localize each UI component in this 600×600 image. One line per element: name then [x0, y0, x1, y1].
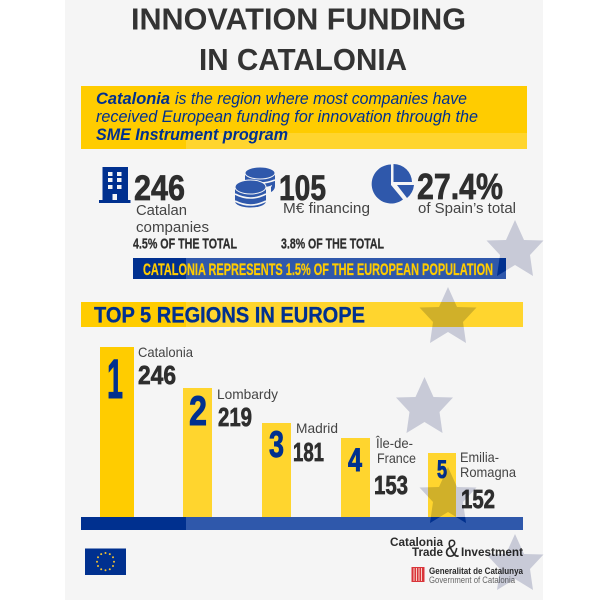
icon: EU flag — [85, 548, 126, 575]
section heading: top 5 regions — [81, 302, 523, 328]
bar 3: Madrid: 3 — [269, 424, 284, 465]
logo: Catalonia Trade & Investment: & — [445, 535, 459, 563]
stat: financing: 105 — [279, 169, 326, 208]
stat: companies: companies — [136, 219, 209, 236]
stat: share of Spain: of Spain’s total — [418, 200, 516, 217]
bar 4: Île-de-France — [341, 435, 416, 517]
bar 2: Lombardy: 2 — [189, 387, 207, 434]
stat: companies: 4.5% OF THE TOTAL — [133, 236, 237, 252]
stat: share of Spain — [372, 164, 516, 217]
logo: Generalitat de Catalunya: Government of Catalonia — [429, 575, 515, 585]
bar 5: Emilia-Romagna — [428, 449, 516, 517]
stat: companies: 246 — [134, 169, 185, 208]
intro banner: received European funding for innovation through the — [96, 107, 478, 126]
intro banner: Catalonia — [96, 89, 170, 108]
stat: companies — [99, 167, 237, 252]
bar 1: Catalonia: 1 — [107, 347, 123, 410]
title: IN CATALONIA — [199, 43, 407, 77]
stat: companies: Catalan — [136, 202, 187, 219]
bar 5: Emilia-Romagna: Romagna — [460, 464, 516, 480]
bar 4: Île-de-France: 4 — [348, 442, 362, 478]
intro banner — [81, 86, 527, 149]
logo: Catalonia Trade & Investment: Catalonia — [390, 537, 444, 549]
bar 1: Catalonia: 246 — [138, 360, 176, 390]
page panel background — [65, 0, 543, 600]
icon: pie chart — [372, 164, 414, 203]
stat: financing: M€ financing — [283, 200, 370, 217]
bar 3: Madrid — [262, 420, 338, 517]
title: INNOVATION FUNDING — [131, 2, 466, 36]
population banner — [133, 258, 506, 279]
logo: Catalonia Trade & Investment — [390, 535, 523, 563]
bar 3: Madrid: 181 — [293, 437, 324, 467]
logo: Generalitat de Catalunya: Generalitat de Catalunya — [429, 566, 524, 576]
logo: Catalonia Trade & Investment: Investment — [461, 547, 523, 559]
bar 1: Catalonia — [100, 344, 193, 517]
bar 5: Emilia-Romagna: 152 — [461, 484, 495, 514]
bar 2: Lombardy: Lombardy — [217, 386, 278, 402]
icon: building — [99, 167, 130, 203]
stat: financing: 3.8% OF THE TOTAL — [281, 236, 384, 252]
logo: Catalonia Trade & Investment: Trade — [412, 547, 443, 559]
stat: share of Spain: 27.4% — [417, 166, 503, 207]
icon: red emblem — [412, 567, 424, 582]
bar 5: Emilia-Romagna: Emilia- — [460, 449, 499, 465]
bar 1: Catalonia: Catalonia — [138, 344, 193, 360]
bar 4: Île-de-France: Île-de- — [375, 435, 413, 451]
bar chart: top 5 regions — [81, 344, 523, 530]
decorative EU stars — [396, 220, 544, 590]
bar 3: Madrid: Madrid — [296, 420, 338, 436]
bar 4: Île-de-France: 153 — [374, 470, 408, 500]
bar 2: Lombardy — [183, 386, 278, 517]
bar 4: Île-de-France: France — [377, 450, 416, 466]
logo: Generalitat de Catalunya — [412, 566, 524, 585]
icon: coins — [235, 167, 275, 208]
bar 2: Lombardy: 219 — [218, 402, 252, 432]
section heading: top 5 regions: TOP 5 REGIONS IN EUROPE — [94, 302, 365, 328]
intro banner: SME Instrument program — [96, 125, 288, 144]
title — [131, 2, 466, 77]
stat: financing — [235, 167, 384, 252]
chart baseline — [81, 517, 523, 530]
bar 5: Emilia-Romagna: 5 — [437, 456, 447, 484]
intro banner: is the region where most companies have — [175, 89, 467, 108]
